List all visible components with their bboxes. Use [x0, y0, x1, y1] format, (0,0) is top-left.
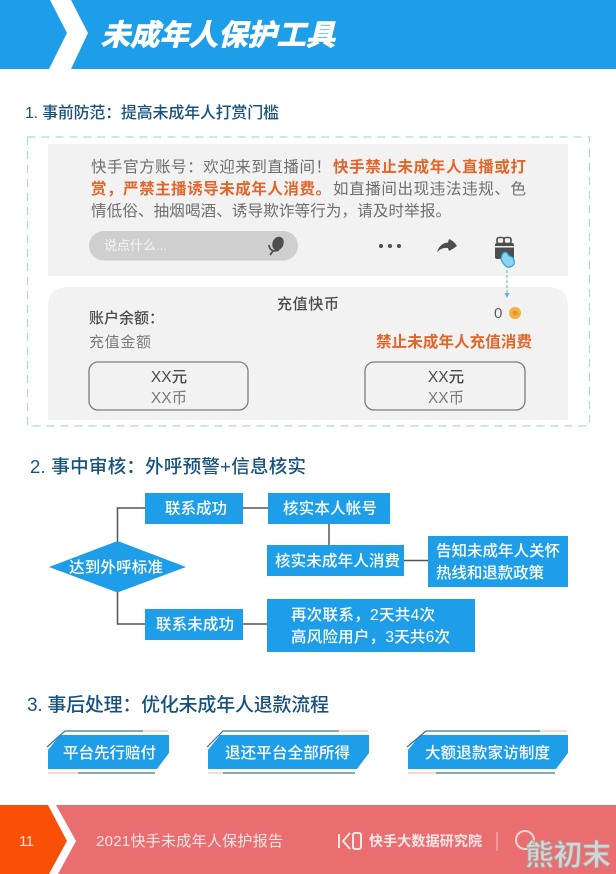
box: contact success: 联系成功 — [165, 500, 227, 518]
watermark: 熊初末 — [525, 839, 611, 872]
report name: 2021快手未成年人保护报告 — [96, 833, 283, 850]
text block: notice: 快手禁止未成年人直播或打 — [333, 157, 526, 176]
icon: coin — [509, 307, 521, 319]
text block: notice: 赏，严禁主播诱导未成年人消费。 — [91, 179, 331, 198]
page number: 11 — [19, 833, 34, 850]
footer — [0, 805, 616, 874]
header banner — [0, 0, 616, 69]
tag: return all income: 退还平台全部所得 — [225, 743, 350, 762]
tag: home visit: 大额退款家访制度 — [425, 743, 550, 762]
input bar: 说点什么... — [104, 238, 167, 253]
text block: notice: 快手官方账号：欢迎来到直播间！ — [91, 158, 331, 176]
icon: pointing hand — [501, 252, 514, 267]
institute name: 快手大数据研究院 — [369, 833, 482, 849]
panel: live room — [48, 144, 568, 276]
heading: section 2: 2. 事中审核：外呼预警+信息核实 — [30, 456, 306, 477]
icon: header chevron — [49, 0, 88, 69]
panel: prevention dashed frame — [28, 137, 590, 426]
decision diamond: 达到外呼标准 — [69, 558, 163, 576]
box: contact success — [145, 493, 243, 524]
box: notify care line — [428, 536, 568, 587]
tag: advance compensation: 平台先行赔付 — [63, 743, 156, 762]
icon: microphone — [269, 235, 286, 255]
page number tab — [0, 805, 67, 874]
divider — [496, 832, 498, 851]
heading: section 3: 3. 事后处理：优化未成年人退款流程 — [27, 694, 329, 716]
tag: advance compensation — [47, 731, 169, 773]
box: retry: 再次联系，2天共4次 — [291, 606, 435, 624]
title: 未成年人保护工具 — [101, 20, 336, 52]
box: notify care line: 热线和退款政策 — [436, 564, 544, 582]
connector lines — [118, 508, 428, 624]
flowchart — [49, 493, 568, 652]
box: retry — [267, 599, 475, 652]
text block: notice — [91, 157, 526, 220]
option box right: XX币 — [428, 389, 464, 407]
icon: gift — [495, 238, 514, 259]
icon: share arrow — [437, 239, 457, 252]
icon: kuaishou logo — [339, 833, 361, 849]
icon: more dots — [379, 244, 401, 248]
panel: recharge — [48, 287, 568, 420]
box: verify spending — [267, 545, 404, 576]
option box left: XX币 — [151, 389, 187, 407]
text: recharge amount: 充值金额 — [89, 334, 151, 351]
option box right: XX元 — [428, 369, 464, 386]
box: notify care line: 告知未成年人关怀 — [436, 542, 560, 560]
callout: recharge ban: 禁止未成年人充值消费 — [376, 332, 532, 351]
text block: notice: 情低俗、抽烟喝酒、诱导欺诈等行为，请及时举报。 — [91, 202, 451, 220]
box: contact failed: 联系未成功 — [156, 616, 234, 634]
tag: home visit — [407, 731, 568, 773]
tag: return all income — [207, 731, 369, 773]
icon: footer chevron — [48, 805, 76, 874]
input bar — [89, 231, 298, 260]
box: retry: 高风险用户，3天共6次 — [291, 628, 450, 646]
box: contact failed — [145, 609, 243, 640]
heading: section 1: 1. 事前防范：提高未成年人打赏门槛 — [25, 103, 279, 122]
box: verify account: 核实本人帐号 — [283, 498, 377, 518]
option box right — [365, 362, 525, 410]
box: verify account — [268, 493, 390, 524]
box: verify spending: 核实未成年人消费 — [275, 551, 400, 570]
text: recharge title: 充值快币 — [277, 296, 339, 313]
option box left — [89, 362, 248, 410]
option box left: XX元 — [151, 369, 187, 386]
icon: partner logo — [516, 831, 534, 849]
decision diamond — [49, 541, 186, 592]
arrow: gift to balance — [504, 270, 510, 298]
text: account balance: 账户余额： — [89, 309, 164, 327]
text block: notice: 如直播间出现违法违规、色 — [333, 180, 526, 198]
text: zero balance: 0 — [494, 305, 502, 322]
